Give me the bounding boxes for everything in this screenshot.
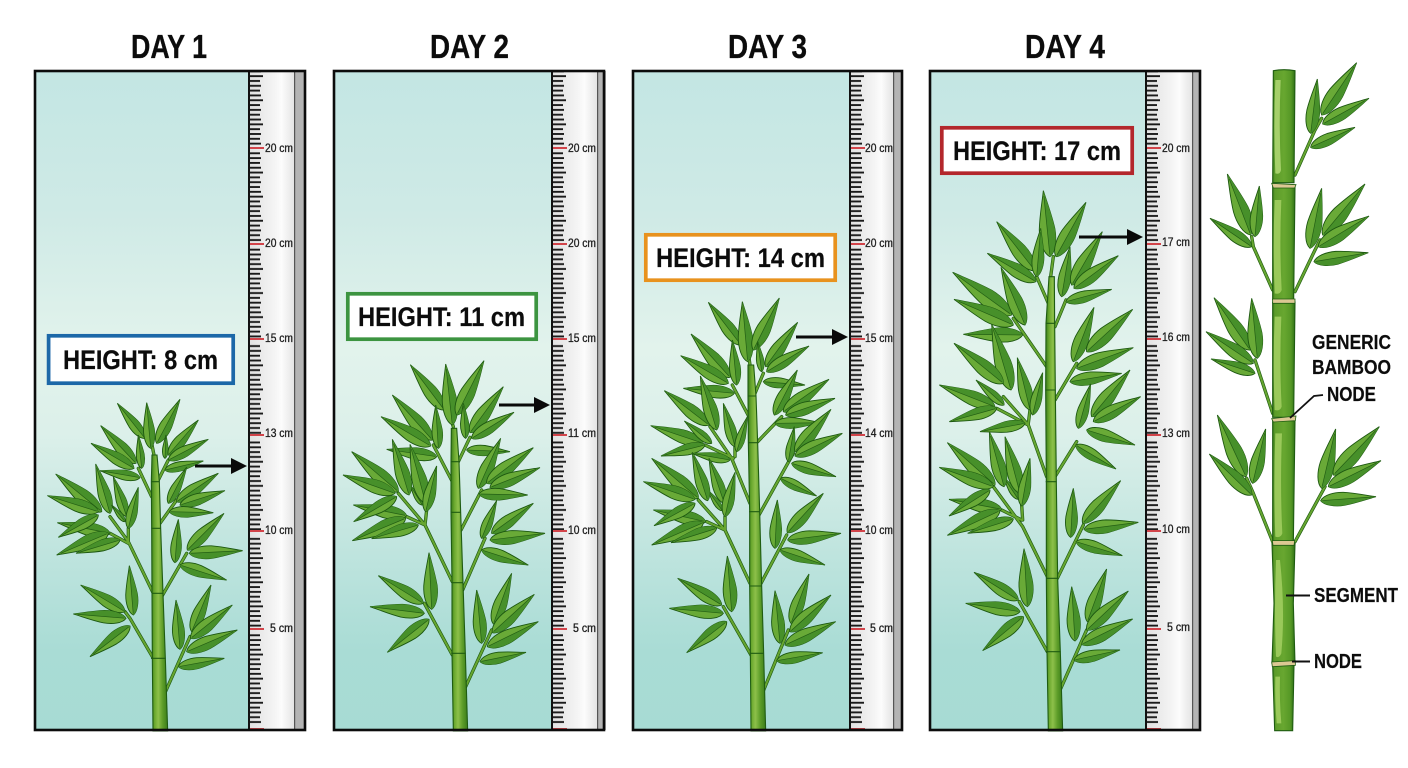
panel: day 3: [633, 71, 903, 731]
nodes: [1272, 183, 1296, 667]
stem: [151, 455, 168, 731]
label: generic bamboo: [1312, 331, 1391, 379]
height label: 17 cm: [942, 128, 1132, 173]
ruler: day 3: [849, 71, 903, 730]
stem: [1046, 277, 1063, 731]
leaves: [1202, 58, 1385, 507]
label: segment with leader: [1286, 584, 1398, 607]
panel: day 2: [334, 71, 606, 731]
height label: 14 cm: HEIGHT: 14 cm: [656, 243, 825, 273]
ruler: day 4: [1145, 71, 1201, 730]
panel: day 4: [930, 71, 1201, 731]
branches: [110, 443, 190, 695]
heading: DAY 4: DAY 4: [1025, 28, 1106, 65]
ruler: day 3: 14 cm: [865, 428, 893, 440]
height label: 8 cm: [49, 336, 233, 383]
ruler: day 2: 11 cm: [568, 428, 596, 440]
ruler: day 3: 20 cm: [865, 143, 893, 155]
ruler: day 1: 5 cm: [270, 623, 293, 635]
stem: [451, 428, 468, 731]
ruler: day 1: 20 cm: [265, 238, 293, 250]
panel: generic bamboo anatomy: [1202, 58, 1398, 731]
ruler: day 1: 20 cm: [265, 143, 293, 155]
panel: day 1: [35, 71, 305, 731]
plant: day 2 bamboo: [341, 357, 546, 731]
label: generic bamboo: GENERIC: [1312, 331, 1391, 354]
branches: [698, 353, 793, 693]
ruler: day 4: 13 cm: [1162, 428, 1190, 440]
label: upper node with leader: [1290, 383, 1376, 418]
label: lower node with leader: NODE: [1314, 650, 1362, 673]
ruler: day 4: 10 cm: [1162, 524, 1190, 536]
ruler: day 1: [248, 71, 304, 730]
leaves: [341, 357, 546, 667]
ruler: day 1: 10 cm: [265, 525, 293, 537]
plant: generic bamboo: [1202, 58, 1385, 731]
ruler: day 4: 5 cm: [1167, 622, 1190, 634]
stem segments: [1272, 70, 1295, 731]
label: lower node with leader: [1292, 650, 1362, 673]
ruler: day 4: 17 cm: [1162, 237, 1190, 249]
height label: 11 cm: [348, 294, 536, 339]
ruler: day 3: 5 cm: [870, 623, 893, 635]
ruler: day 2: 20 cm: [568, 143, 596, 155]
branches: [993, 257, 1087, 692]
arrow: day 1 height: [195, 458, 247, 474]
height label: 8 cm: HEIGHT: 8 cm: [63, 345, 218, 375]
stem: [748, 365, 766, 731]
branches: [398, 417, 492, 692]
ruler: day 4: 16 cm: [1162, 332, 1190, 344]
leaves: [937, 190, 1144, 665]
ruler: day 2: 20 cm: [568, 238, 596, 250]
leaves: [45, 396, 243, 672]
branches: [1247, 118, 1325, 542]
height label: 14 cm: [646, 235, 835, 280]
leaves: [641, 295, 845, 666]
heading: DAY 1: DAY 1: [131, 28, 207, 65]
ruler: day 3: 20 cm: [865, 238, 893, 250]
ruler: day 1: 15 cm: [265, 333, 293, 345]
arrow: day 3 height: [796, 329, 848, 345]
ruler: day 2: 15 cm: [568, 333, 596, 345]
ruler: day 3: 15 cm: [865, 333, 893, 345]
ruler: day 4: 20 cm: [1162, 143, 1190, 155]
label: generic bamboo: BAMBOO: [1312, 356, 1391, 379]
height label: 17 cm: HEIGHT: 17 cm: [953, 136, 1121, 166]
arrow: day 4 height: [1079, 229, 1143, 245]
ruler: day 2: 10 cm: [568, 525, 596, 537]
label: upper node with leader: NODE: [1327, 383, 1376, 406]
ruler: day 1: 13 cm: [265, 428, 293, 440]
height label: 11 cm: HEIGHT: 11 cm: [358, 302, 525, 332]
plant: day 3 bamboo: [641, 295, 845, 731]
ruler: day 2: 5 cm: [573, 623, 596, 635]
ruler: day 2: [551, 71, 606, 730]
heading: DAY 3: DAY 3: [728, 28, 807, 65]
heading: DAY 2: DAY 2: [430, 28, 509, 65]
plant: day 1 bamboo: [45, 396, 243, 731]
ruler: day 3: 10 cm: [865, 525, 893, 537]
arrow: day 2 height: [499, 397, 550, 413]
plant: day 4 bamboo: [937, 190, 1144, 731]
